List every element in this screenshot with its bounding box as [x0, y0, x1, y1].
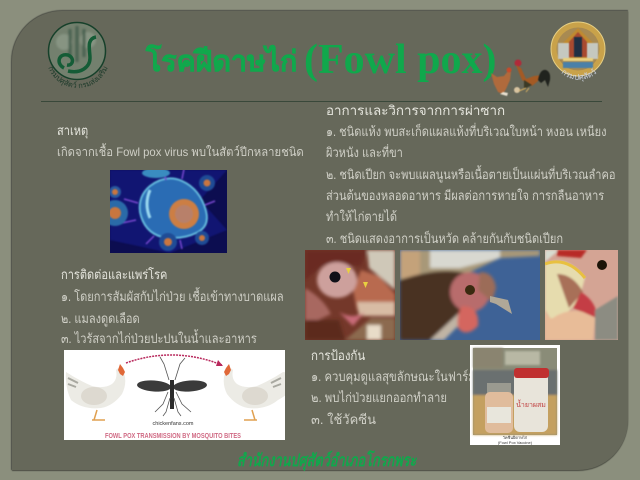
text block: transmission: ๓. ไวรัสจากไก่ป่วยปะปนในน้ำและอาหาร [61, 331, 257, 346]
icon: right chicken [224, 364, 296, 420]
logo: department seal: กรมปศุสัตว์ กรมส่งเสริม [48, 66, 108, 88]
text block: symptoms: ๑. ชนิดแห้ง พบสะเก็ดแผลแห้งที่บริเวณใบหน้า หงอน เหนียง [326, 124, 606, 139]
text block: cause: เกิดจากเชื้อ Fowl pox virus พบในสัตว์ปีกหลายชนิด [57, 145, 304, 159]
photo: vaccine bottles: วัคซีนฝีดาษไก่ [503, 435, 528, 440]
icon: mosquito [137, 357, 207, 416]
text block: symptoms: ๓. ชนิดแสดงอาการเป็นหวัด คล้ายกันกับชนิดเปียก [326, 231, 563, 246]
heading: cause: สาเหตุ [57, 123, 88, 138]
text block: symptoms: ๒. ชนิดเปียก จะพบแผลนูนหรือเนื้อตายเป็นแผ่นที่บริเวณลำคอ [326, 167, 616, 182]
photo: chicken head with lesions [400, 250, 540, 340]
photo: vaccine bottles [470, 345, 560, 445]
text block: symptoms: ผิวหนัง และที่ขา [326, 145, 403, 160]
photo: chicken mouth [545, 250, 618, 340]
title: Thai part: โรคฝีดาษไก่ [146, 46, 297, 78]
photo: vaccine bottles: (Fowl Pox Vaccine) [498, 440, 533, 445]
text block: prevention: ๑. ควบคุมดูแลสุขลักษณะในฟาร์ม [311, 369, 476, 384]
diagram: mosquito transmission: chickenfans.com [153, 421, 194, 427]
title: English part: (Fowl pox) [304, 37, 496, 83]
diagram: mosquito transmission: FOWL POX TRANSMISSION BY MOSQUITO BITES [105, 431, 241, 440]
text block: cause [57, 123, 304, 159]
text block: transmission [61, 267, 284, 346]
heading: symptoms: อาการและวิการจากการผ่าซาก [326, 103, 505, 118]
icon: left chicken [66, 364, 125, 420]
text block: symptoms [326, 103, 616, 246]
text block: prevention [311, 348, 476, 427]
footer text: สำนักงานปศุสัตว์อำเภอโกรกพระ [237, 451, 416, 470]
text block: prevention: ๓. ใช้วัคซีน [311, 412, 376, 427]
text block: transmission: ๑. โดยการสัมผัสกับไก่ป่วย เชื้อเข้าทางบาดแผล [61, 289, 284, 304]
text block: prevention: ๒. พบไก่ป่วยแยกออกทำลาย [311, 390, 447, 405]
logo: livestock department [550, 22, 606, 82]
title [145, 37, 496, 83]
text block: symptoms: ส่วนต้นของหลอดอาหาร มีผลต่อการหายใจ การกลืนอาหาร [326, 188, 604, 203]
logo: livestock department: กรมปศุสัตว์ [562, 68, 596, 82]
heading: prevention: การป้องกัน [311, 348, 365, 363]
diagram: mosquito transmission [64, 350, 285, 440]
image: virus [110, 170, 227, 253]
text block: symptoms: ทำให้ไก่ตายได้ [326, 209, 397, 224]
photo: chicken eye lesions [305, 250, 395, 340]
arrow: transmission path [126, 355, 223, 366]
logo: department seal [48, 22, 108, 88]
icon: chickens [490, 59, 551, 96]
text block: transmission: ๒. แมลงดูดเลือด [61, 311, 140, 326]
photo: vaccine bottles: น้ำยาผสม [516, 398, 546, 409]
heading: transmission: การติดต่อและแพร่โรค [61, 267, 167, 282]
